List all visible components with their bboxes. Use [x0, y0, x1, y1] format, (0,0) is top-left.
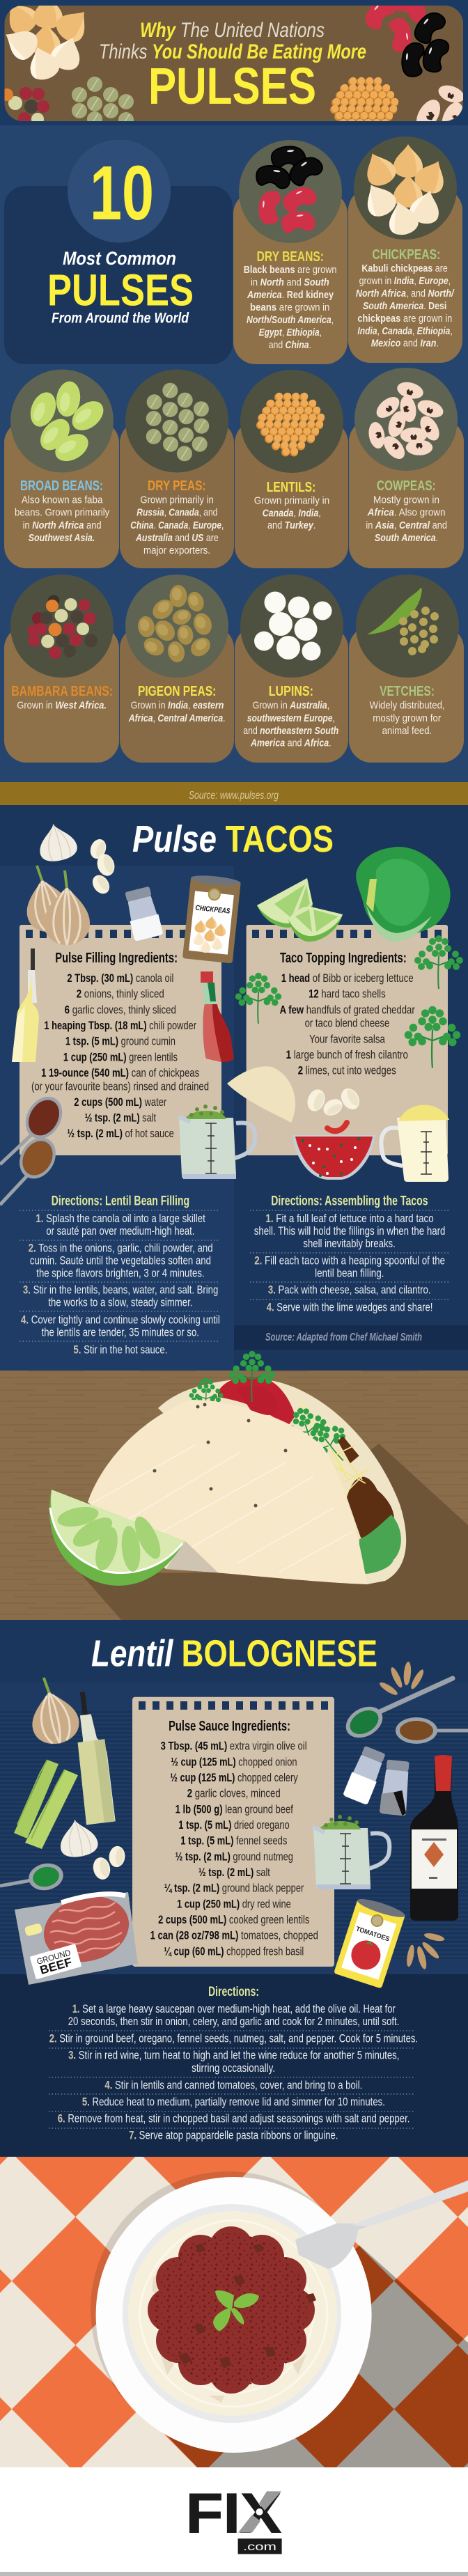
olive oil bottle: [12, 949, 39, 1062]
filling ingredients list: 1 cup (250 mL) green lentils: [63, 1051, 178, 1063]
directions: bolognese: stirring occasionally.: [192, 2062, 275, 2075]
sauce ingredients list: ½ tsp. (2 mL) salt: [198, 1866, 270, 1879]
filling ingredients list: 1 tsp. (5 mL) ground cumin: [65, 1036, 176, 1048]
chickpeas text: South America. Desi: [363, 301, 446, 312]
directions: bolognese: 4. Stir in lentils and canned tomatoes, cover, and bring to a boil.: [104, 2079, 362, 2091]
lettuce: [358, 848, 448, 942]
directions: bolognese: 1. Set a large heavy saucepan over medium-high heat, add the olive oil. Heat for: [72, 2003, 396, 2015]
icon: vetches: [356, 575, 459, 678]
cowpeas text: in Asia, Central and: [366, 520, 447, 531]
chickpeas text: Kabuli chickpeas are: [361, 263, 448, 274]
illustration: bolognese plate on tablecloth: [0, 2157, 468, 2467]
lupins title: LUPINS:: [269, 684, 313, 699]
filling ingredients list: 6 garlic cloves, thinly sliced: [65, 1004, 176, 1016]
sauce ingredients list: ¼ cup (60 mL) chopped fresh basil: [164, 1945, 304, 1958]
vetches text: animal feed.: [382, 726, 432, 737]
directions: bolognese: 5. Reduce heat to medium, partially remove lid and simmer for 10 minutes.: [82, 2095, 385, 2108]
filling ingredients heading: Pulse Filling Ingredients:: [55, 951, 178, 966]
lupins text: [243, 700, 338, 749]
sauce: [155, 2233, 316, 2387]
illustration: bolognese ingredients: [0, 1660, 468, 1989]
filling ingredients list: [31, 972, 209, 1140]
dry beans text: Egypt, Ethiopia,: [259, 327, 322, 338]
icon: dry beans: [239, 140, 342, 243]
salsa bowl: [292, 1123, 375, 1180]
lentils text: Grown primarily in: [254, 496, 329, 507]
topping ingredients list: [280, 972, 415, 1077]
spice spoons: [0, 1090, 70, 1205]
icon: lime wedge: [49, 1490, 185, 1586]
card: dry peas: [120, 369, 234, 568]
panel: pulse sauce ingredients: [132, 1697, 334, 1967]
topping ingredients list: 1 large bunch of fresh cilantro: [286, 1049, 408, 1061]
header title: PULSES: [148, 57, 316, 115]
salt and pepper shakers: [343, 1745, 412, 1816]
directions: lentil bean filling: the lentils are tender, 35 minutes or so.: [42, 1327, 199, 1339]
chickpeas text: grown in India, Europe,: [359, 276, 451, 287]
directions: assembling the tacos: 3. Pack with cheese, salsa, and cilantro.: [268, 1284, 430, 1297]
pigeon peas text: Grown in India, eastern: [131, 700, 224, 711]
directions: lentil bean filling: 1. Splash the canola oil into a large skillet: [36, 1212, 205, 1225]
icon: dry peas: [125, 369, 228, 472]
sauce ingredients list: 1 cup (250 mL) dry red wine: [177, 1898, 291, 1910]
directions: lentil bean filling: 2. Toss in the onions, garlic, chili powder, and: [29, 1242, 213, 1255]
panel: taco topping ingredients: [247, 925, 448, 1155]
filling ingredients list: ½ tsp. (2 mL) of hot sauce: [67, 1127, 174, 1140]
topping ingredients list: 1 head of Bibb or iceberg lettuce: [281, 972, 414, 985]
chickpeas text: Mexico and Iran.: [371, 338, 439, 350]
directions: lentil bean filling: 3. Stir in the lentils, beans, water, and salt. Bring: [23, 1284, 218, 1297]
section: pulse tacos: [0, 805, 468, 1371]
topping ingredients list: 12 hard taco shells: [309, 988, 386, 1001]
dry peas text: major exporters.: [143, 545, 210, 556]
directions: lentil bean filling: 4. Cover tightly and continue slowly cooking until: [21, 1314, 220, 1327]
ground beef package: GROUND: [36, 1948, 72, 1967]
paper holes: [26, 930, 187, 938]
panel: 10 most common title: [4, 139, 233, 364]
card: lupins: [235, 575, 348, 763]
lentils text: and Turkey.: [267, 520, 315, 531]
icon: chickpeas: [354, 136, 457, 240]
dry peas text: Russia, Canada, and: [136, 508, 217, 519]
filling ingredients list: 1 heaping Tbsp. (18 mL) chili powder: [44, 1020, 196, 1032]
directions: lentil bean filling: [20, 1194, 220, 1357]
topping ingredients list: 2 limes, cut into wedges: [298, 1065, 396, 1077]
card: pigeon peas: [120, 575, 234, 763]
lentils text: Canada, India,: [263, 508, 321, 519]
fork: [295, 2180, 468, 2269]
icon: lentils: [240, 370, 343, 473]
directions: assembling the tacos: lentil bean filling.: [315, 1267, 384, 1280]
dry beans text: beans are grown in: [250, 302, 329, 313]
sauce ingredients list: [150, 1740, 318, 1958]
card: cowpeas: [349, 368, 464, 568]
sauce ingredients list: 2 garlic cloves, minced: [187, 1788, 281, 1800]
lentils title: LENTILS:: [267, 480, 315, 495]
bambara beans text: Grown in West Africa.: [17, 700, 107, 711]
cowpeas text: [366, 494, 447, 544]
dry peas text: Grown primarily in: [140, 494, 214, 506]
directions: bolognese: Directions:: [208, 1985, 259, 1999]
ground beef package: BEEF: [38, 1956, 74, 1977]
directions: assembling the tacos: 1. Fit a full leaf of lettuce into a hard taco: [265, 1212, 434, 1225]
lupins text: and northeastern South: [243, 726, 338, 737]
filling ingredients list: 2 cups (500 mL) water: [74, 1096, 167, 1109]
lime wedges: [257, 878, 343, 942]
cowpeas title: COWPEAS:: [377, 478, 436, 494]
dry beans text: North/South America,: [247, 315, 334, 326]
footer: fix.com logo: FIX: [186, 2483, 281, 2545]
panel: 10 most common title: PULSES: [47, 265, 194, 315]
directions: lentil bean filling: or sauté pan over medium-high heat.: [46, 1225, 194, 1238]
header title: Thinks You Should Be Eating More: [99, 40, 366, 63]
card: dry beans: [233, 140, 348, 364]
icon: pigeon peas: [125, 575, 228, 678]
cowpeas text: Mostly grown in: [373, 494, 439, 506]
source band: [0, 782, 468, 805]
broad beans text: [15, 494, 110, 544]
tomatoes can: TOMATOES: [355, 1926, 391, 1943]
filling ingredients list: ½ tsp. (2 mL) salt: [85, 1112, 156, 1125]
cheese measuring cup: [381, 1104, 449, 1182]
chickpeas text: India, Canada, Ethiopia,: [357, 326, 453, 337]
illustration: taco ingredients: CHICKPEAS: [195, 904, 231, 916]
panel: 10 most common title: From Around the World: [52, 311, 189, 326]
icon: cowpeas: [354, 368, 458, 471]
ground beef package: [15, 1887, 138, 1985]
wine bottle: [410, 1755, 458, 1921]
vetches text: mostly grown for: [373, 713, 441, 724]
footer: fix.com logo: [0, 2467, 468, 2576]
section: 10 most common pulses: [0, 125, 468, 782]
pigeon peas text: Africa, Central America.: [128, 713, 226, 724]
paper holes: [139, 1701, 328, 1710]
card: broad beans: [4, 369, 119, 568]
chickpeas title: CHICKPEAS:: [372, 247, 440, 263]
bambara beans title: BAMBARA BEANS:: [11, 684, 113, 699]
card: bambara beans: [4, 575, 119, 763]
sauce ingredients heading: Pulse Sauce Ingredients:: [169, 1719, 290, 1734]
sauce ingredients list: 1 tsp. (5 mL) fennel seeds: [180, 1835, 287, 1848]
filling ingredients list: 2 onions, thinly sliced: [77, 988, 164, 1001]
dry beans text: Black beans are grown: [244, 265, 336, 276]
vetches title: VETCHES:: [380, 684, 435, 699]
spoons: [341, 1678, 468, 1744]
directions: lentil bean filling: Directions: Lentil Bean Filling: [52, 1194, 189, 1209]
panel: 10 most common title: Most Common: [63, 248, 176, 269]
lupins text: America and Africa.: [250, 738, 332, 749]
dry beans text: in North and South: [251, 277, 329, 288]
section: lentil bolognese: [0, 1620, 468, 2157]
footer: fix.com logo: .com: [243, 2541, 276, 2553]
icon: lupins: [240, 575, 343, 678]
directions: lentil bean filling: 5. Stir in the hot sauce.: [73, 1344, 167, 1357]
source band: Source: www.pulses.org: [189, 790, 279, 802]
sauce ingredients list: ½ tsp. (2 mL) ground nutmeg: [176, 1850, 293, 1863]
header pulses illustration: [0, 0, 467, 137]
directions: bolognese: [49, 1985, 418, 2142]
icon: broad beans: [10, 369, 114, 472]
sauce ingredients list: 2 cups (500 mL) cooked green lentils: [158, 1914, 309, 1926]
topping ingredients heading: Taco Topping Ingredients:: [280, 951, 407, 966]
dry beans text: America. Red kidney: [247, 290, 334, 301]
paper holes: [252, 930, 442, 938]
icon: bambara beans: [10, 575, 114, 678]
filling ingredients list: (or your favourite beans) rinsed and drained: [31, 1080, 209, 1093]
sauce ingredients list: ¼ tsp. (2 mL) ground black pepper: [164, 1882, 304, 1895]
sauce ingredients list: ½ cup (125 mL) chopped onion: [171, 1756, 297, 1768]
panel: header: [0, 0, 468, 137]
topping ingredients list: or taco blend cheese: [305, 1017, 389, 1030]
directions: lentil bean filling: the works to a slow, steady simmer.: [48, 1297, 192, 1309]
panel: pulse filling ingredients: [20, 925, 221, 1155]
tomatoes can: [334, 1896, 407, 1989]
cowpeas text: South America.: [375, 533, 438, 544]
broad beans text: beans. Grown primarily: [15, 508, 110, 519]
sauce ingredients list: 1 tsp. (5 mL) dried oregano: [178, 1819, 290, 1832]
lentils text: [254, 496, 329, 531]
sauce ingredients list: 3 Tbsp. (45 mL) extra virgin olive oil: [161, 1740, 307, 1753]
tacos title: Pulse TACOS: [132, 818, 334, 860]
broad beans text: Also known as faba: [22, 494, 103, 506]
directions: assembling the tacos: [250, 1194, 448, 1314]
header title: [99, 19, 366, 115]
vetches text: Widely distributed,: [370, 700, 445, 711]
card: lentils: [235, 370, 348, 568]
sauce ingredients list: 1 lb (500 g) lean ground beef: [176, 1803, 293, 1816]
chickpeas text: [356, 263, 455, 350]
dry peas text: [130, 494, 224, 556]
illustration: taco on wood table: [0, 1354, 468, 1620]
hot sauce bottle: [201, 971, 234, 1062]
dry beans text: [244, 265, 336, 351]
directions: lentil bean filling: the spice flavors brighten, 3 or 4 minutes.: [36, 1267, 205, 1280]
dry beans text: and China.: [269, 340, 311, 351]
directions: assembling the tacos: shell inevitably breaks.: [303, 1238, 396, 1250]
topping ingredients list: Your favorite salsa: [309, 1033, 386, 1045]
directions: bolognese: 7. Serve atop pappardelle pasta ribbons or linguine.: [129, 2130, 338, 2142]
lupins text: Grown in Australia,: [253, 700, 329, 711]
chickpeas text: North Africa, and North/: [356, 288, 455, 299]
basil: [213, 2290, 259, 2331]
illustration: taco ingredients: [0, 820, 460, 1205]
dry peas title: DRY PEAS:: [148, 478, 206, 494]
filling ingredients list: 2 Tbsp. (30 mL) canola oil: [67, 972, 173, 985]
cowpeas text: Africa. Also grown: [367, 508, 445, 519]
filling ingredients list: 1 19-ounce (540 mL) can of chickpeas: [41, 1067, 199, 1079]
sauce ingredients list: ½ cup (125 mL) chopped celery: [170, 1772, 298, 1784]
dry peas text: Australia and US are: [135, 533, 219, 544]
sauce ingredients list: 1 can (28 oz/798 mL) tomatoes, chopped: [150, 1930, 318, 1942]
pigeon peas text: [128, 700, 226, 724]
header title: Why The United Nations: [140, 19, 325, 42]
pigeon peas title: PIGEON PEAS:: [138, 684, 216, 699]
broad beans text: in North Africa and: [23, 520, 102, 531]
topping ingredients list: A few handfuls of grated cheddar: [280, 1004, 415, 1016]
card: chickpeas: [348, 136, 462, 363]
dry beans title: DRY BEANS:: [257, 249, 324, 265]
directions: lentil bean filling: cumin. Sauté until the vegetables soften and: [30, 1255, 211, 1267]
lupins text: southwestern Europe,: [247, 713, 335, 724]
dry peas text: China. Canada, Europe,: [130, 520, 224, 531]
chickpeas text: chickpeas are grown in: [357, 313, 452, 325]
broad beans text: Southwest Asia.: [29, 533, 95, 544]
card: vetches: [349, 575, 464, 763]
panel: 10 most common title: 10: [90, 150, 154, 236]
broad beans title: BROAD BEANS:: [20, 478, 103, 494]
vetches text: [370, 700, 445, 737]
bolognese title: Lentil BOLOGNESE: [91, 1633, 377, 1675]
